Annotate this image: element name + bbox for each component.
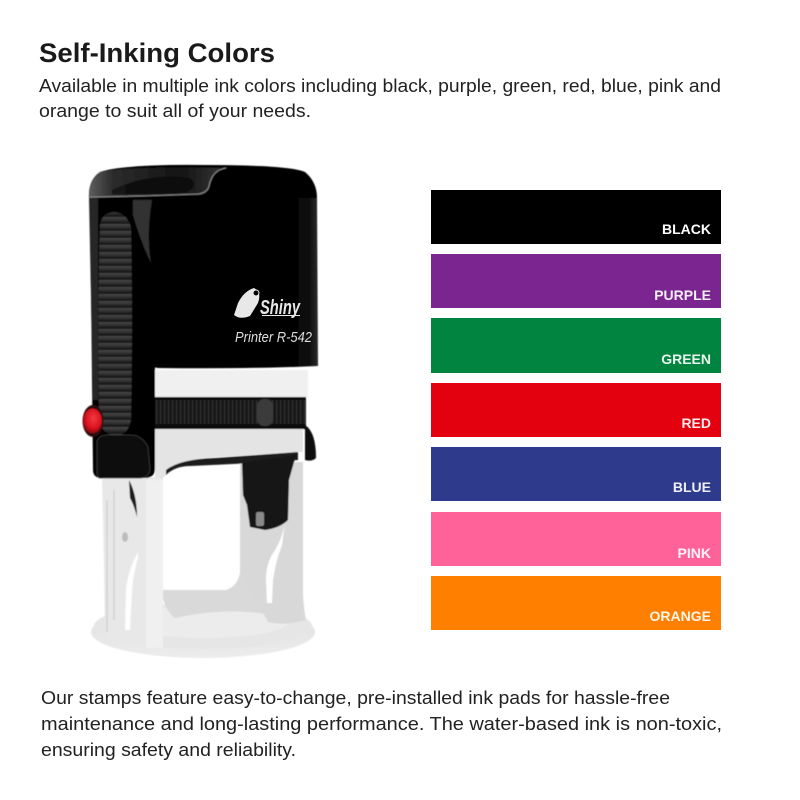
black foot: [97, 435, 150, 478]
swatch: green: [431, 318, 721, 373]
footer text: Our stamps feature easy-to-change, pre-installed ink pads for hassle-free: [41, 688, 670, 708]
ink pad holder: [242, 455, 296, 530]
swatch: purple: [431, 254, 721, 308]
footer text: [41, 688, 722, 760]
swatch: purple: PURPLE: [654, 287, 711, 303]
swatch: green: GREEN: [661, 351, 711, 367]
lid highlight: [89, 168, 221, 198]
back wall: [163, 572, 292, 620]
right clip: [305, 425, 316, 461]
stamp collar: [155, 427, 303, 478]
red button: [82, 405, 104, 437]
left leg: [102, 477, 163, 648]
swatch: red: [431, 383, 721, 437]
white band: [155, 370, 308, 398]
knurled ring: [155, 397, 306, 429]
title: Self-Inking Colors: [39, 38, 275, 68]
cap lid: [89, 165, 317, 198]
swatch: orange: [431, 576, 721, 630]
intro text: Available in multiple ink colors including black, purple, green, red, blue, pink and: [39, 76, 721, 96]
lid notch line: [90, 168, 226, 197]
swatch: pink: PINK: [678, 545, 711, 561]
stamp product illustration: [82, 165, 318, 658]
swatch: blue: [431, 447, 721, 501]
swatch: pink: [431, 512, 721, 566]
brand logo: [234, 288, 301, 319]
swatch: blue: BLUE: [673, 479, 711, 495]
brand logo: Shiny: [260, 297, 301, 319]
lid dark patch: [112, 176, 194, 194]
side grip: [98, 212, 132, 436]
swatch: red: RED: [681, 415, 711, 431]
right leg: [240, 462, 306, 624]
footer text: ensuring safety and reliability.: [41, 740, 296, 760]
swatch: black: BLACK: [662, 221, 711, 237]
intro text: orange to suit all of your needs.: [39, 101, 311, 121]
intro text: [39, 76, 721, 121]
model name: Printer R-542: [235, 329, 313, 346]
main stamp housing: [132, 197, 318, 368]
left side body: [90, 197, 155, 478]
body highlights: [133, 200, 152, 263]
swatch: orange: ORANGE: [650, 608, 711, 624]
color swatches: [431, 190, 721, 630]
stamp base ring: [91, 603, 315, 658]
swatch: black: [431, 190, 721, 244]
collar shadow: [166, 452, 298, 475]
footer text: maintenance and long-lasting performance. The water-based ink is non-toxic,: [41, 714, 722, 734]
